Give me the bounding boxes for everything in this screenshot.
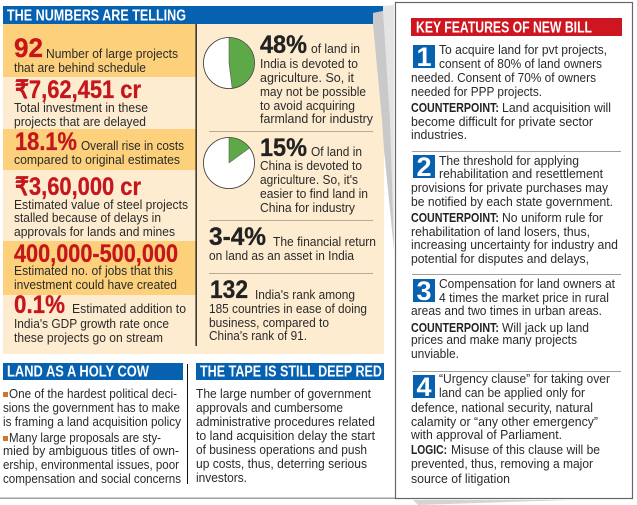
panel: the tape is still deep red bbox=[196, 363, 384, 485]
stat: ease of doing business bbox=[209, 276, 367, 343]
stat: 92 projects: Number of large projects bbox=[46, 46, 178, 61]
feature 1: Land acquisition will bbox=[502, 100, 611, 115]
feature 3: areas and two times in urban areas. bbox=[411, 303, 602, 318]
stat: 92 projects bbox=[3, 24, 196, 77]
stat: steel projects: ₹3,60,000 cr bbox=[15, 173, 141, 201]
panel: the numbers are telling bbox=[3, 5, 394, 354]
feature 4: land can be applied only for bbox=[439, 385, 586, 400]
stat: 92 projects: 92 bbox=[14, 33, 43, 63]
feature 4: with approval of Parliament. bbox=[410, 427, 562, 442]
stat: financial return: The financial return bbox=[273, 234, 376, 249]
panel: land as a holy cow: compensation and social concerns bbox=[3, 471, 181, 486]
stat: total investment: projects that are delayed bbox=[14, 114, 146, 129]
stat: rise in costs: Overall rise in costs bbox=[81, 138, 184, 153]
stat: China farmland: agriculture. So, it's bbox=[260, 172, 358, 187]
feature 1: needed. Consent of 70% of owners bbox=[411, 70, 596, 85]
feature 3: 3 bbox=[416, 276, 432, 306]
feature 1: industries. bbox=[411, 127, 467, 142]
feature 1: become difficult for private sector bbox=[411, 114, 594, 129]
stat: ease of doing business: 185 countries in ease of doing bbox=[209, 301, 367, 316]
stat: ease of doing business: China's rank of 91. bbox=[209, 328, 307, 343]
feature 1 bbox=[411, 42, 611, 142]
feature 1: COUNTERPOINT: bbox=[411, 100, 499, 115]
feature 2: increasing uncertainty for industry and bbox=[411, 237, 618, 252]
stat: total investment: Total investment in these bbox=[14, 100, 148, 115]
stat: ease of doing business: India's rank among bbox=[255, 287, 355, 302]
stat: financial return bbox=[209, 223, 376, 263]
panel: land as a holy cow: LAND AS A HOLY COW bbox=[7, 364, 150, 380]
stat: China farmland: China is devoted to bbox=[260, 158, 362, 173]
panel: the tape is still deep red: to land acquisition delay the start bbox=[196, 428, 375, 443]
stat: total investment: ₹7,62,451 cr bbox=[15, 76, 141, 104]
feature 4: 4 bbox=[416, 372, 432, 402]
page fold shadow bbox=[0, 498, 570, 505]
feature 2: No uniform rule for bbox=[502, 210, 604, 225]
stat: China farmland: China for industry bbox=[260, 200, 355, 215]
stat: financial return: 3-4% bbox=[209, 223, 266, 251]
stat: GDP growth: 0.1% bbox=[14, 291, 65, 319]
feature 3: 4 times the market price in rural bbox=[439, 290, 609, 305]
feature 2: provisions for private purchases may bbox=[411, 180, 608, 195]
stat: India farmland: agriculture. So, it bbox=[260, 70, 354, 85]
panel: the tape is still deep red: The large number of government bbox=[196, 386, 371, 401]
feature 2: COUNTERPOINT: bbox=[411, 210, 499, 225]
panel: land as a holy cow: Many large proposals are sty- bbox=[9, 430, 161, 445]
stat: steel projects: stalled because of delays in bbox=[14, 210, 161, 225]
stat: steel projects: Estimated value of steel projects bbox=[14, 197, 188, 212]
panel: land as a holy cow: One of the hardest political deci- bbox=[9, 386, 177, 401]
stat: rise in costs: compared to original estimates bbox=[14, 152, 180, 167]
feature 4: defence, national security, natural bbox=[411, 400, 593, 415]
stat: India farmland: to avoid acquiring bbox=[260, 98, 355, 113]
stat: 92 projects: that are behind schedule bbox=[14, 60, 146, 75]
feature 2: rehabilitation of land losers, thus, bbox=[411, 224, 590, 239]
stat: India farmland: India is devoted to bbox=[260, 56, 358, 71]
feature 3: COUNTERPOINT: bbox=[411, 320, 499, 335]
stat: jobs: 400,000-500,000 bbox=[14, 240, 178, 268]
feature 1: 1 bbox=[416, 42, 432, 72]
stat: India farmland bbox=[260, 31, 373, 126]
feature 4: calamity or “any other emergency” bbox=[411, 414, 598, 429]
feature 2 bbox=[411, 152, 618, 266]
stat: India farmland: may not be possible bbox=[260, 84, 366, 99]
feature 2: rehabilitation and resettlement bbox=[439, 166, 603, 181]
header bar bbox=[3, 5, 394, 250]
feature 4: LOGIC: bbox=[411, 442, 447, 457]
feature 1: To acquire land for pvt projects, bbox=[439, 42, 607, 57]
panel: the tape is still deep red: investors. bbox=[196, 470, 247, 485]
stat: GDP growth: Estimated addition to bbox=[72, 301, 186, 316]
panel: the tape is still deep red: approvals and cumbersome bbox=[196, 400, 343, 415]
stat: GDP growth: these projects go on stream bbox=[14, 330, 163, 345]
stat: India farmland: of land in bbox=[311, 41, 360, 56]
stat: jobs bbox=[3, 240, 196, 295]
stat: India farmland: 48% bbox=[260, 31, 307, 59]
panel: land as a holy cow bbox=[3, 363, 183, 486]
stat: China farmland: easier to find land in bbox=[260, 186, 368, 201]
panel: the tape is still deep red: of business operations and push bbox=[196, 442, 367, 457]
panel: key features of new bill bbox=[396, 2, 632, 498]
stat: total investment bbox=[14, 76, 148, 129]
stat: GDP growth: India's GDP growth rate once bbox=[14, 316, 169, 331]
header bar: THE NUMBERS ARE TELLING bbox=[7, 8, 186, 24]
panel: land as a holy cow: mied by ambiguous titles of own- bbox=[3, 443, 179, 458]
stat: steel projects bbox=[14, 173, 188, 239]
feature 2: be notified by each state government. bbox=[411, 194, 613, 209]
feature 4: source of litigation bbox=[411, 471, 510, 486]
stat: jobs: Estimated no. of jobs that this bbox=[14, 263, 173, 278]
stat: China farmland: 15% bbox=[260, 134, 307, 162]
stat: GDP growth bbox=[14, 291, 186, 345]
pie: China 15% bbox=[204, 138, 254, 188]
feature 3: unviable. bbox=[411, 346, 459, 361]
feature 2: 2 bbox=[416, 152, 432, 182]
feature 4 bbox=[410, 371, 611, 486]
panel: land as a holy cow: ership, environmental issues, poor bbox=[3, 457, 179, 472]
feature 4: “Urgency clause” for taking over bbox=[439, 371, 611, 386]
stat: financial return: on land as an asset in India bbox=[209, 248, 355, 263]
feature 1: consent of 80% of land owners bbox=[439, 56, 602, 71]
stat: India farmland: farmland for industry bbox=[260, 111, 373, 126]
feature 2: potential for disputes and delays, bbox=[411, 251, 589, 266]
feature 3: Compensation for land owners at bbox=[439, 276, 615, 291]
stat: ease of doing business: 132 bbox=[210, 276, 248, 304]
panel: the tape is still deep red: up costs, thus, deterring serious bbox=[196, 456, 367, 471]
panel: land as a holy cow: sions the government has to make bbox=[3, 400, 180, 415]
stat: China farmland bbox=[260, 134, 368, 215]
panel: the tape is still deep red: administrative procedures related bbox=[196, 414, 375, 429]
feature 2: The threshold for applying bbox=[439, 153, 579, 168]
stat: China farmland: Of land in bbox=[311, 144, 362, 159]
stat: rise in costs: 18.1% bbox=[15, 128, 77, 156]
feature 1: needed for PPP projects. bbox=[411, 84, 542, 99]
panel: the tape is still deep red: THE TAPE IS STILL DEEP RED bbox=[200, 364, 382, 380]
feature 4: prevented, thus, removing a major bbox=[411, 456, 594, 471]
stat: jobs: investment could have created bbox=[14, 277, 177, 292]
pie: India 48% bbox=[204, 37, 255, 88]
stat: rise in costs bbox=[3, 128, 196, 170]
stat: ease of doing business: business, compared to bbox=[209, 315, 329, 330]
feature 3 bbox=[411, 276, 615, 361]
stat: steel projects: approvals for lands and mines bbox=[14, 224, 175, 239]
feature 3: prices and make many projects bbox=[411, 332, 577, 347]
feature 4: Misuse of this clause will be bbox=[451, 442, 600, 457]
feature 3: Will jack up land bbox=[502, 320, 589, 335]
panel: land as a holy cow: is framing a land acquisition policy bbox=[3, 414, 181, 429]
